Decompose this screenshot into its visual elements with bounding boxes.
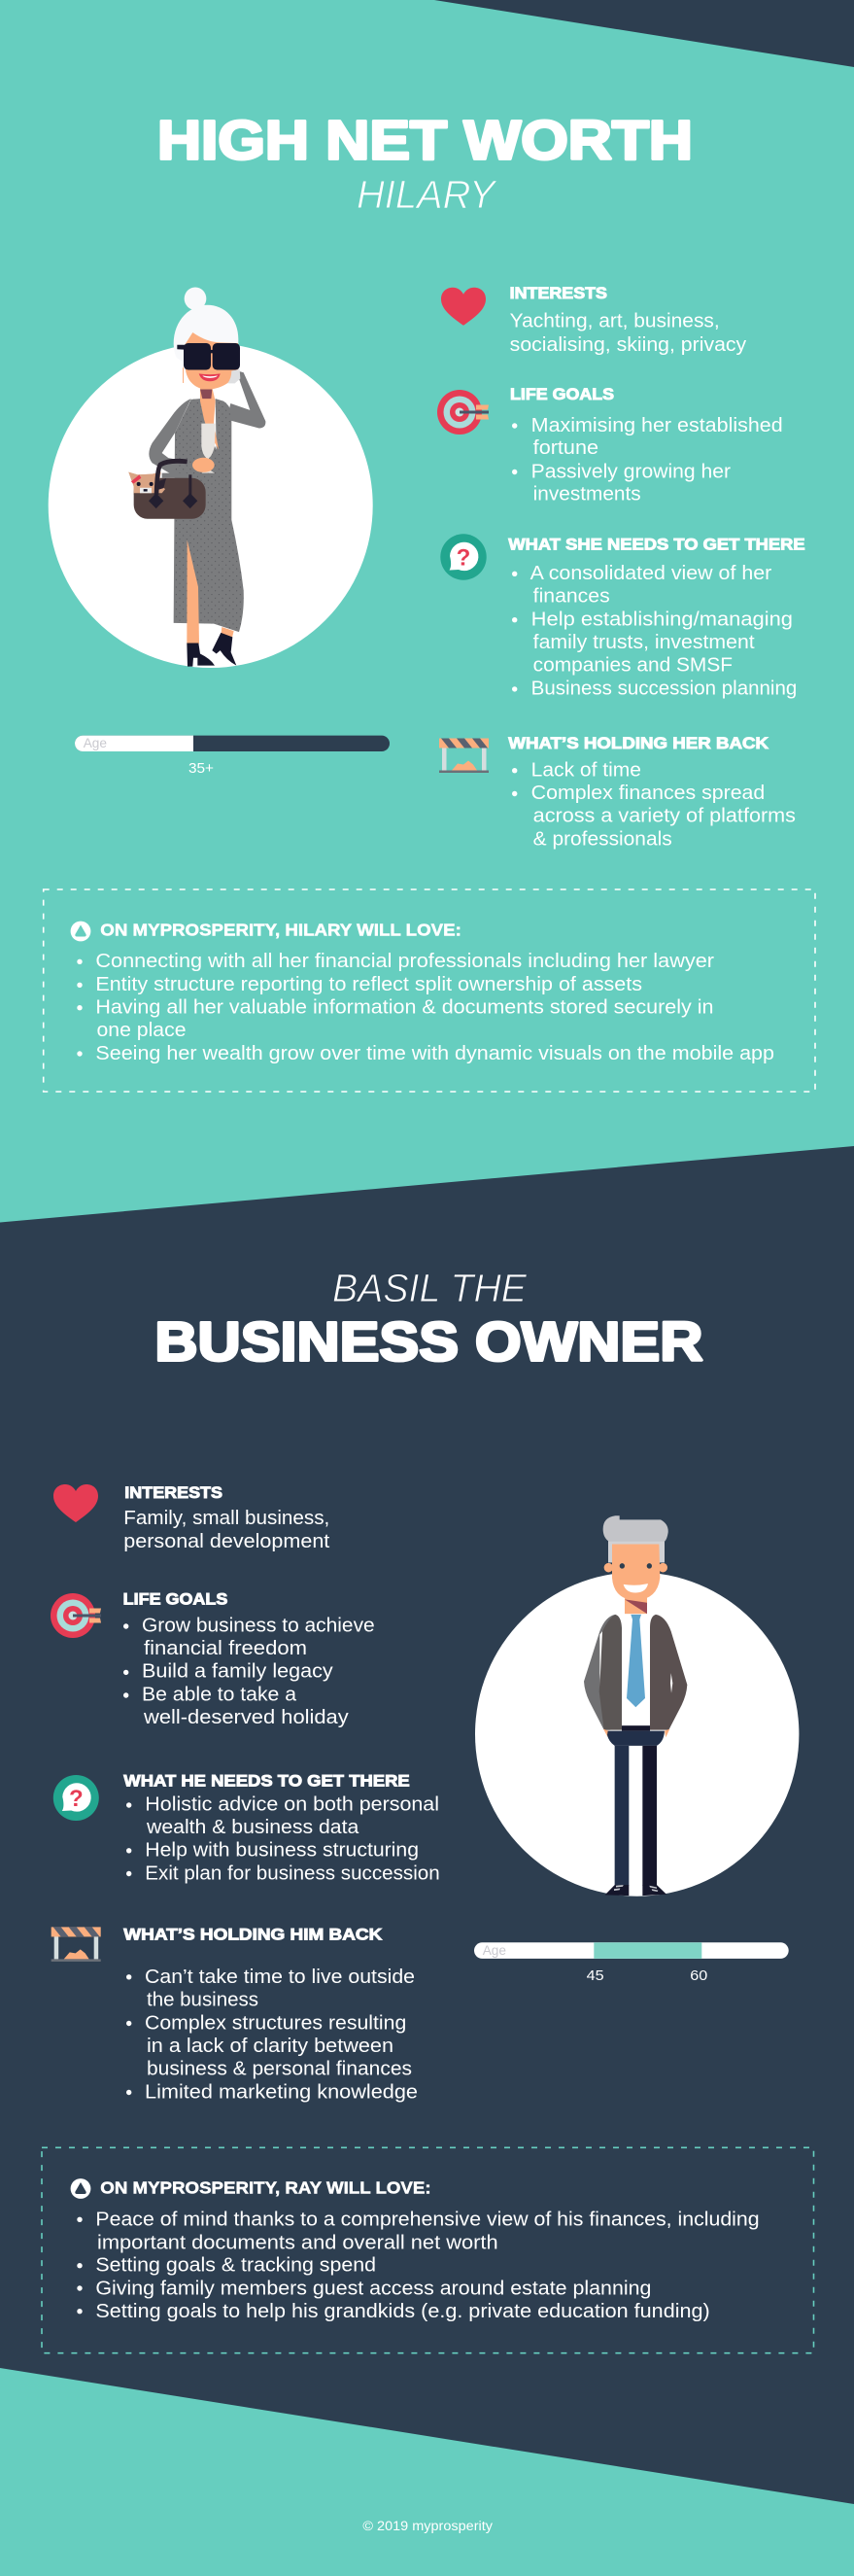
age bar: basil [474, 1942, 789, 1984]
age bar: basil: 45 [587, 1968, 604, 1984]
text: life goals list: financial freedom [144, 1638, 307, 1659]
text: needs list: companies and SMSF [533, 655, 733, 677]
icon: question bubble: ? [69, 1786, 84, 1812]
text: holding back list: across a variety of platforms [533, 806, 796, 827]
dark section band [0, 1146, 854, 2504]
heading: life goals: LIFE GOALS [510, 386, 614, 403]
text: life goals list [512, 415, 783, 505]
heading: life goals: LIFE GOALS [123, 1591, 227, 1609]
text: interests list: personal development [123, 1531, 330, 1552]
age bar: hilary: Age [84, 735, 107, 750]
text: needs list [126, 1793, 440, 1884]
text: life goals list: Build a family legacy [142, 1661, 333, 1683]
icon: heart [53, 1484, 98, 1522]
text: ray benefits list [77, 2209, 760, 2322]
icon: question bubble: ? [457, 544, 470, 572]
text: needs list: Help establishing/managing [531, 609, 793, 630]
text: holding back list: Lack of time [531, 759, 641, 781]
title: high net worth: HIGH NET WORTH [157, 109, 693, 171]
callout: ray will love [42, 2147, 814, 2353]
text: holding back list: in a lack of clarity between [147, 2036, 393, 2057]
panel: holding back (basil) [51, 1926, 418, 2103]
text: holding back list: Complex finances spread [531, 783, 765, 804]
text: ray benefits list: important documents and overall net worth [97, 2232, 498, 2253]
heading: on myprosperity: ON MYPROSPERITY, RAY WILL LOVE: [100, 2178, 431, 2198]
text: hilary benefits list: Connecting with all her financial professionals including her lawyer [95, 951, 714, 972]
panel: interests (basil) [53, 1484, 330, 1552]
text: life goals list [123, 1615, 375, 1728]
text: hilary benefits list: one place [97, 1020, 187, 1041]
heading: interests: INTERESTS [510, 285, 607, 302]
heading: what's holding him back: WHAT’S HOLDING HIM BACK [123, 1926, 382, 1943]
text: hilary benefits list: Seeing her wealth grow over time with dynamic visuals on the mobile app [95, 1043, 774, 1064]
text: needs list: finances [533, 585, 610, 607]
text: life goals list: well-deserved holiday [143, 1707, 349, 1728]
text: interests list [510, 310, 746, 356]
text: needs list: Help with business structuring [145, 1840, 419, 1862]
panel: holding back (hilary) [439, 735, 796, 850]
text: holding back list: Limited marketing knowledge [145, 2081, 418, 2103]
top right dark corner [434, 0, 854, 67]
text: holding back list: Can’t take time to live outside [145, 1967, 415, 1988]
panel: needs (hilary) [440, 534, 805, 699]
footer copyright: © 2019 myprosperity [362, 2519, 493, 2533]
text: needs list: family trusts, investment [533, 632, 755, 653]
icon: myprosperity logo [71, 922, 90, 941]
text: interests list [123, 1508, 330, 1552]
text: needs list: Business succession planning [531, 678, 797, 699]
text: life goals list: Grow business to achieve [142, 1615, 375, 1636]
text: ray benefits list: Peace of mind thanks to a comprehensive view of his finances, including [95, 2209, 760, 2230]
subtitle: hilary: HILARY [357, 172, 497, 217]
text: holding back list: the business [147, 1990, 258, 2011]
text: holding back list [126, 1967, 418, 2103]
illustration: basil figure [584, 1515, 687, 1896]
age bar: hilary [75, 735, 390, 777]
callout: hilary will love [44, 889, 815, 1092]
text: life goals list: Maximising her established [531, 415, 783, 436]
text: interests list: Family, small business, [123, 1508, 329, 1529]
age bar: hilary: 35+ [188, 761, 214, 777]
illustration: hilary figure [128, 287, 265, 667]
panel: life goals (hilary) [437, 386, 783, 505]
panel: needs (basil) [53, 1772, 440, 1884]
panel: life goals (basil) [51, 1591, 375, 1728]
text: hilary benefits list: Having all her valuable information & documents stored securely in [95, 997, 713, 1019]
text: holding back list: & professionals [533, 828, 672, 850]
text: needs list: Holistic advice on both personal [145, 1793, 439, 1815]
text: holding back list: Complex structures resulting [145, 2012, 406, 2034]
heading: what she needs: WHAT SHE NEEDS TO GET THERE [508, 536, 805, 553]
text: needs list [512, 563, 797, 699]
age bar: basil: 60 [690, 1968, 707, 1984]
icon: myprosperity logo [71, 2178, 90, 2199]
icon: target [437, 390, 489, 435]
text: life goals list: Passively growing her [531, 461, 731, 482]
age bar: basil: Age [483, 1942, 506, 1958]
text: ray benefits list: Giving family members guest access around estate planning [95, 2279, 651, 2300]
text: holding back list: business & personal finances [147, 2059, 412, 2080]
icon: target [51, 1593, 101, 1638]
portrait circle: basil [475, 1572, 799, 1897]
text: life goals list: Be able to take a [142, 1684, 297, 1705]
panel: interests (hilary) [441, 285, 746, 356]
subtitle: basil the: BASIL THE [332, 1266, 528, 1310]
text: interests list: socialising, skiing, privacy [510, 334, 746, 356]
title: business owner: BUSINESS OWNER [154, 1310, 702, 1373]
text: needs list: A consolidated view of her [530, 563, 772, 584]
text: ray benefits list: Setting goals & tracking spend [95, 2255, 376, 2277]
heading: interests: INTERESTS [124, 1484, 222, 1502]
text: hilary benefits list [77, 951, 774, 1064]
icon: heart [441, 288, 486, 326]
icon: barrier [439, 739, 489, 773]
text: holding back list [512, 759, 796, 850]
text: ray benefits list: Setting goals to help his grandkids (e.g. private education funding) [95, 2301, 710, 2322]
portrait circle: hilary [49, 343, 373, 668]
text: needs list: Exit plan for business succession [145, 1862, 440, 1884]
heading: what's holding her back: WHAT’S HOLDING HER BACK [508, 735, 769, 752]
icon: question bubble [53, 1775, 99, 1821]
icon: question bubble [440, 534, 487, 580]
text: life goals list: fortune [533, 437, 598, 459]
text: life goals list: investments [533, 483, 641, 505]
text: needs list: wealth & business data [146, 1817, 359, 1838]
text: interests list: Yachting, art, business, [510, 310, 720, 331]
text: hilary benefits list: Entity structure reporting to reflect split ownership of assets [95, 974, 642, 995]
heading: what he needs: WHAT HE NEEDS TO GET THERE [123, 1772, 410, 1790]
heading: on myprosperity: ON MYPROSPERITY, HILARY WILL LOVE: [100, 921, 461, 940]
icon: barrier [51, 1927, 101, 1962]
